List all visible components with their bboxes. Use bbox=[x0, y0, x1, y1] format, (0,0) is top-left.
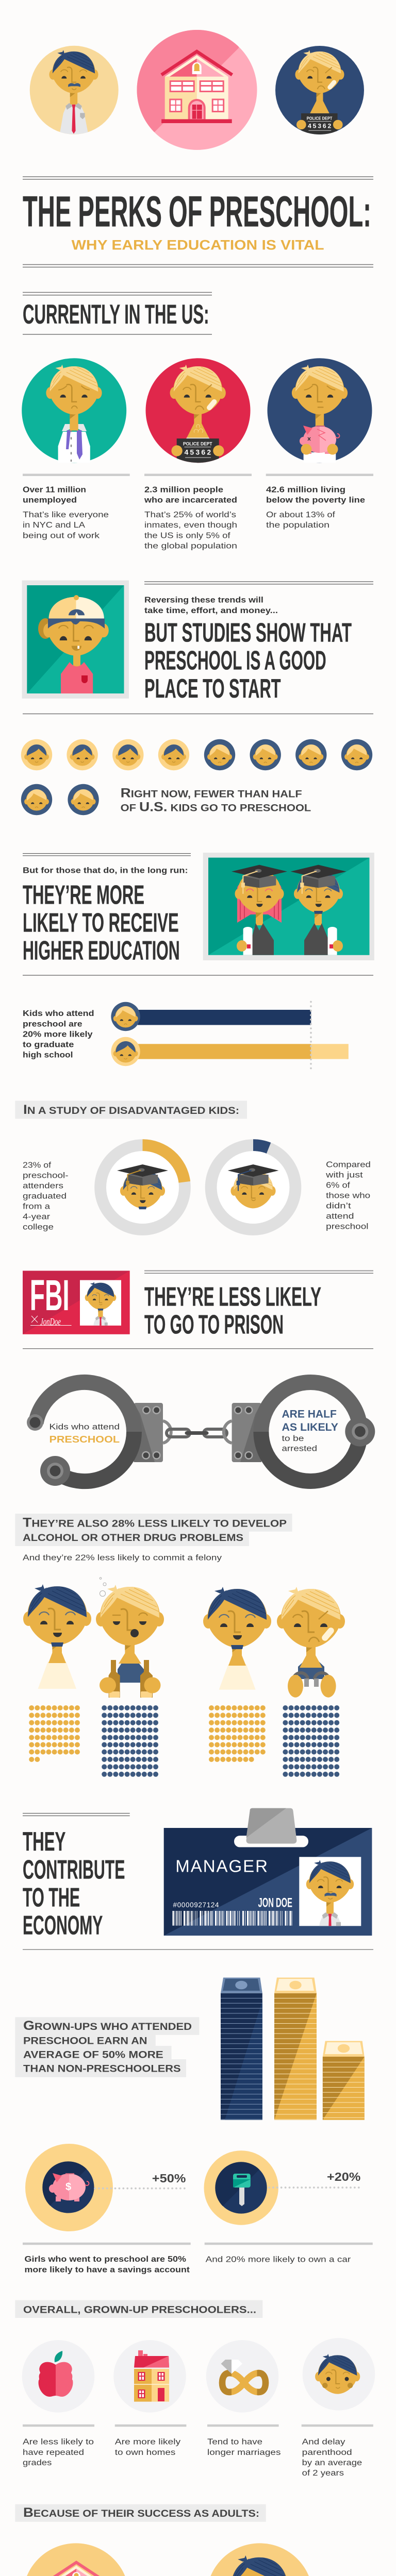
icon: piggy bank bbox=[25, 2144, 113, 2231]
bar: non-preschool bbox=[111, 1002, 311, 1031]
heading bbox=[23, 1827, 125, 1940]
text: 6%: 6% of bbox=[326, 1181, 351, 1190]
heading: ALCOHOL OR OTHER DRUG PROBLEMS bbox=[23, 1532, 243, 1544]
heading: HIGHER EDUCATION bbox=[23, 936, 180, 965]
chart: short gold money stack bbox=[323, 2041, 365, 2120]
text: savings bbox=[25, 2255, 190, 2275]
bar: preschool bbox=[111, 1037, 349, 1066]
panel: earnings bbox=[15, 1977, 373, 2275]
caption: Kids who attend bbox=[23, 1009, 94, 1018]
text: repeated grades: Are less likely to bbox=[23, 2438, 94, 2447]
intro: But for those that do, in the long run: bbox=[23, 866, 188, 875]
heading: OVERALL, GROWN-UP PRESCHOOLERS... bbox=[23, 2304, 256, 2315]
icon: framed graduates bbox=[203, 853, 374, 960]
caption: preschool are bbox=[23, 1020, 82, 1029]
text: 6%: those who bbox=[326, 1192, 370, 1200]
text: longer marriages: longer marriages bbox=[207, 2448, 281, 2457]
heading: TO THE bbox=[23, 1883, 80, 1912]
heading: TO GO TO PRISON bbox=[144, 1310, 284, 1340]
icon: prisoner with mugshot plaque bbox=[275, 46, 364, 135]
text: repeated grades: have repeated bbox=[23, 2448, 84, 2457]
heading: CONTRIBUTE bbox=[23, 1855, 125, 1885]
label: +50%: +50% bbox=[152, 2172, 186, 2185]
donut: 6% bbox=[205, 1139, 301, 1235]
text: delay parenthood: of 2 years bbox=[302, 2469, 344, 2478]
heading: BECAUSE OF THEIR SUCCESS AS ADULTS: bbox=[23, 2505, 259, 2520]
subtitle: WHY EARLY EDUCATION IS VITAL bbox=[72, 237, 324, 252]
stat: poverty: 42.6 million living bbox=[266, 486, 345, 495]
stat: unemployed: in NYC and LA bbox=[23, 521, 86, 530]
text: 6%: with just bbox=[325, 1171, 364, 1180]
chart: gold money stack bbox=[274, 1977, 317, 2120]
icon: car key bbox=[204, 2150, 278, 2225]
text: 23% bbox=[23, 1161, 69, 1232]
heading: CURRENTLY IN THE US: bbox=[23, 299, 209, 330]
text: 23%: graduated bbox=[23, 1192, 67, 1201]
stat: incarcerated bbox=[144, 486, 237, 550]
icon: FBI card: JonDoe bbox=[40, 1316, 61, 1328]
text: delay parenthood: parenthood bbox=[302, 2448, 352, 2457]
stat: poverty bbox=[266, 486, 365, 530]
heading: THEY’RE MORE bbox=[23, 880, 144, 910]
text: 6%: preschool bbox=[326, 1223, 368, 1231]
text: delay parenthood: by an average bbox=[302, 2459, 362, 2467]
panel: incarcerated: 45362 bbox=[184, 448, 211, 456]
text: are half as likely bbox=[282, 1409, 338, 1453]
text: longer marriages bbox=[207, 2438, 281, 2457]
icon: prisoner with mugshot plaque: POLICE DEPT bbox=[307, 116, 333, 121]
header illustrations bbox=[30, 30, 364, 150]
text: 23%: preschool- bbox=[23, 1172, 69, 1180]
stat: incarcerated: the US is only 5% of bbox=[144, 532, 230, 540]
title block bbox=[23, 177, 373, 267]
graphic: handcuffs bbox=[27, 1382, 375, 1486]
intro text: Reversing these trends will bbox=[144, 596, 263, 605]
heading bbox=[23, 880, 180, 965]
text: are half as likely: arrested bbox=[282, 1445, 317, 1453]
chart: fewer than half of kids bbox=[21, 739, 372, 815]
stat: incarcerated: inmates, even though bbox=[144, 521, 237, 530]
heading: IN A STUDY OF DISADVANTAGED KIDS: bbox=[23, 1103, 239, 1117]
donut: 23% bbox=[94, 1139, 191, 1235]
panel: contribute to the economy bbox=[23, 1808, 373, 1950]
icon: FBI card bbox=[23, 1270, 130, 1336]
graduate: woman bbox=[232, 865, 287, 955]
heading: GROWN-UPS WHO ATTENDED bbox=[23, 2019, 192, 2033]
stat: unemployed: being out of work bbox=[23, 532, 100, 540]
icon: prisoner with mugshot plaque: 45362 bbox=[308, 122, 332, 129]
panel: incarcerated bbox=[145, 358, 251, 464]
chain bbox=[167, 1429, 227, 1437]
dots: drinker bbox=[104, 1708, 156, 1774]
character: law-abiding bbox=[203, 1587, 271, 1690]
caption bbox=[121, 786, 311, 814]
icon: framed kid in cap bbox=[22, 580, 129, 699]
left cuff bbox=[27, 1382, 171, 1486]
text: are half as likely: to be bbox=[282, 1434, 304, 1443]
panel: alcohol, drugs and felony bbox=[15, 1514, 345, 1774]
text: 6%: Compared bbox=[326, 1161, 371, 1170]
text: own homes: Are more likely bbox=[115, 2438, 180, 2447]
caption: OF U.S. KIDS GO TO PRESCHOOL bbox=[121, 800, 311, 814]
icon: house bbox=[134, 2350, 169, 2402]
intro text: take time, effort, and money... bbox=[144, 606, 278, 615]
icon: infinity ring bbox=[221, 2360, 266, 2392]
heading bbox=[144, 618, 352, 704]
text: 23%: attenders bbox=[23, 1182, 63, 1191]
text: kids who attend preschool: PRESCHOOL bbox=[50, 1434, 120, 1445]
icon: manager ID badge: #0000927124 bbox=[173, 1901, 219, 1909]
stat: incarcerated: the global population bbox=[144, 542, 237, 550]
text: savings: Girls who went to preschool are 50% bbox=[25, 2255, 186, 2264]
panel: higher education bbox=[23, 853, 374, 975]
icon: man with wallet in circle bbox=[207, 2543, 313, 2576]
stat: unemployed: Over 11 million bbox=[23, 486, 86, 495]
heading: PLACE TO START bbox=[144, 674, 281, 704]
icon: manager ID badge bbox=[164, 1808, 372, 1943]
panel: incarcerated: POLICE DEPT bbox=[183, 441, 212, 446]
text: 6%: attend bbox=[326, 1212, 354, 1221]
text: 6%: didn’t bbox=[326, 1202, 352, 1211]
character: drinker bbox=[96, 1578, 164, 1698]
text: are half as likely: AS LIKELY bbox=[282, 1421, 338, 1433]
dots: felon bbox=[285, 1708, 337, 1774]
caption: high school bbox=[23, 1051, 73, 1059]
heading: ECONOMY bbox=[23, 1910, 103, 1940]
icon: manager ID badge: JON DOE bbox=[258, 1895, 292, 1910]
stat: poverty: the population bbox=[266, 521, 329, 530]
caption: to graduate bbox=[23, 1041, 74, 1049]
intro text bbox=[144, 596, 278, 615]
heading: THEY’RE ALSO 28% LESS LIKELY TO DEVELOP bbox=[23, 1515, 287, 1530]
character: felon in cuffs bbox=[277, 1587, 345, 1698]
text: delay parenthood bbox=[302, 2438, 362, 2478]
icon: manager ID badge: MANAGER bbox=[175, 1857, 268, 1876]
heading: LIKELY TO RECEIVE bbox=[23, 908, 179, 938]
text: repeated grades bbox=[23, 2438, 94, 2467]
stat: poverty: below the poverty line bbox=[266, 496, 365, 505]
icon: parent face bbox=[315, 2354, 360, 2394]
icon: FBI card: FBI bbox=[30, 1271, 70, 1319]
text: 23%: college bbox=[23, 1223, 54, 1232]
text: kids who attend preschool bbox=[50, 1423, 120, 1445]
heading bbox=[23, 1515, 287, 1544]
dots: non-drinker bbox=[31, 1708, 83, 1759]
icon: piggy bank: $ bbox=[65, 2181, 71, 2193]
panel: because of their success bbox=[15, 2504, 354, 2576]
panel: study of disadvantaged kids bbox=[15, 1100, 371, 1235]
panel: overall, grown-up preschoolers bbox=[15, 2300, 375, 2478]
right cuff bbox=[224, 1382, 375, 1481]
stat: unemployed bbox=[23, 486, 109, 540]
section: currently in the US bbox=[22, 293, 373, 550]
panel: unemployed bbox=[22, 358, 126, 463]
text: savings: more likely to have a savings account bbox=[25, 2266, 190, 2275]
character: non-drinker bbox=[23, 1584, 91, 1689]
text: car: And 20% more likely to own a car bbox=[206, 2256, 351, 2264]
chart: high school graduation bars bbox=[23, 1002, 349, 1070]
heading: THEY bbox=[23, 1827, 65, 1857]
text: 23%: 23% of bbox=[23, 1161, 52, 1170]
text: 23%: 4-year bbox=[23, 1213, 50, 1222]
heading: AVERAGE OF 50% MORE bbox=[23, 2049, 163, 2061]
stat: unemployed: That’s like everyone bbox=[23, 511, 109, 519]
text: 23%: from a bbox=[23, 1202, 50, 1211]
panel: preschool is a good place to start bbox=[22, 580, 373, 714]
heading bbox=[23, 2019, 192, 2075]
caption: 20% more likely bbox=[23, 1030, 93, 1039]
stat: incarcerated: 2.3 million people bbox=[144, 486, 223, 495]
text: 6% bbox=[325, 1161, 371, 1231]
caption: RIGHT NOW, FEWER THAN HALF bbox=[121, 786, 302, 801]
stat: unemployed: unemployed bbox=[23, 496, 77, 505]
icon: school house bbox=[137, 30, 257, 150]
heading: THAN NON-PRESCHOOLERS bbox=[23, 2063, 181, 2075]
text: own homes bbox=[115, 2438, 180, 2457]
dots: law-abiding bbox=[211, 1708, 263, 1759]
text: kids who attend preschool: Kids who attend bbox=[50, 1423, 120, 1432]
text: repeated grades: grades bbox=[23, 2459, 52, 2467]
icon: apple bbox=[39, 2351, 73, 2397]
label: +20%: +20% bbox=[327, 2170, 360, 2183]
text: own homes: to own homes bbox=[115, 2448, 176, 2457]
heading: PRESCHOOL EARN AN bbox=[23, 2036, 147, 2047]
text: delay parenthood: And delay bbox=[302, 2438, 345, 2447]
caption bbox=[23, 1009, 94, 1059]
graduate: man bbox=[291, 865, 346, 955]
chart: navy money stack bbox=[221, 1977, 262, 2120]
icon: man in office shirt bbox=[30, 46, 119, 134]
stat: incarcerated: That’s 25% of world’s bbox=[144, 511, 236, 519]
panel: poverty bbox=[267, 358, 372, 463]
panel: less likely to go to prison bbox=[23, 1270, 373, 1349]
stat: incarcerated: who are incarcerated bbox=[144, 496, 237, 505]
heading bbox=[144, 1282, 321, 1340]
subtext: And they’re 22% less likely to commit a felony bbox=[23, 1554, 222, 1562]
icon: school in circle bbox=[23, 2543, 129, 2576]
text: are half as likely: ARE HALF bbox=[282, 1409, 337, 1420]
text: longer marriages: Tend to have bbox=[207, 2438, 262, 2447]
stat: poverty: Or about 13% of bbox=[266, 511, 336, 519]
